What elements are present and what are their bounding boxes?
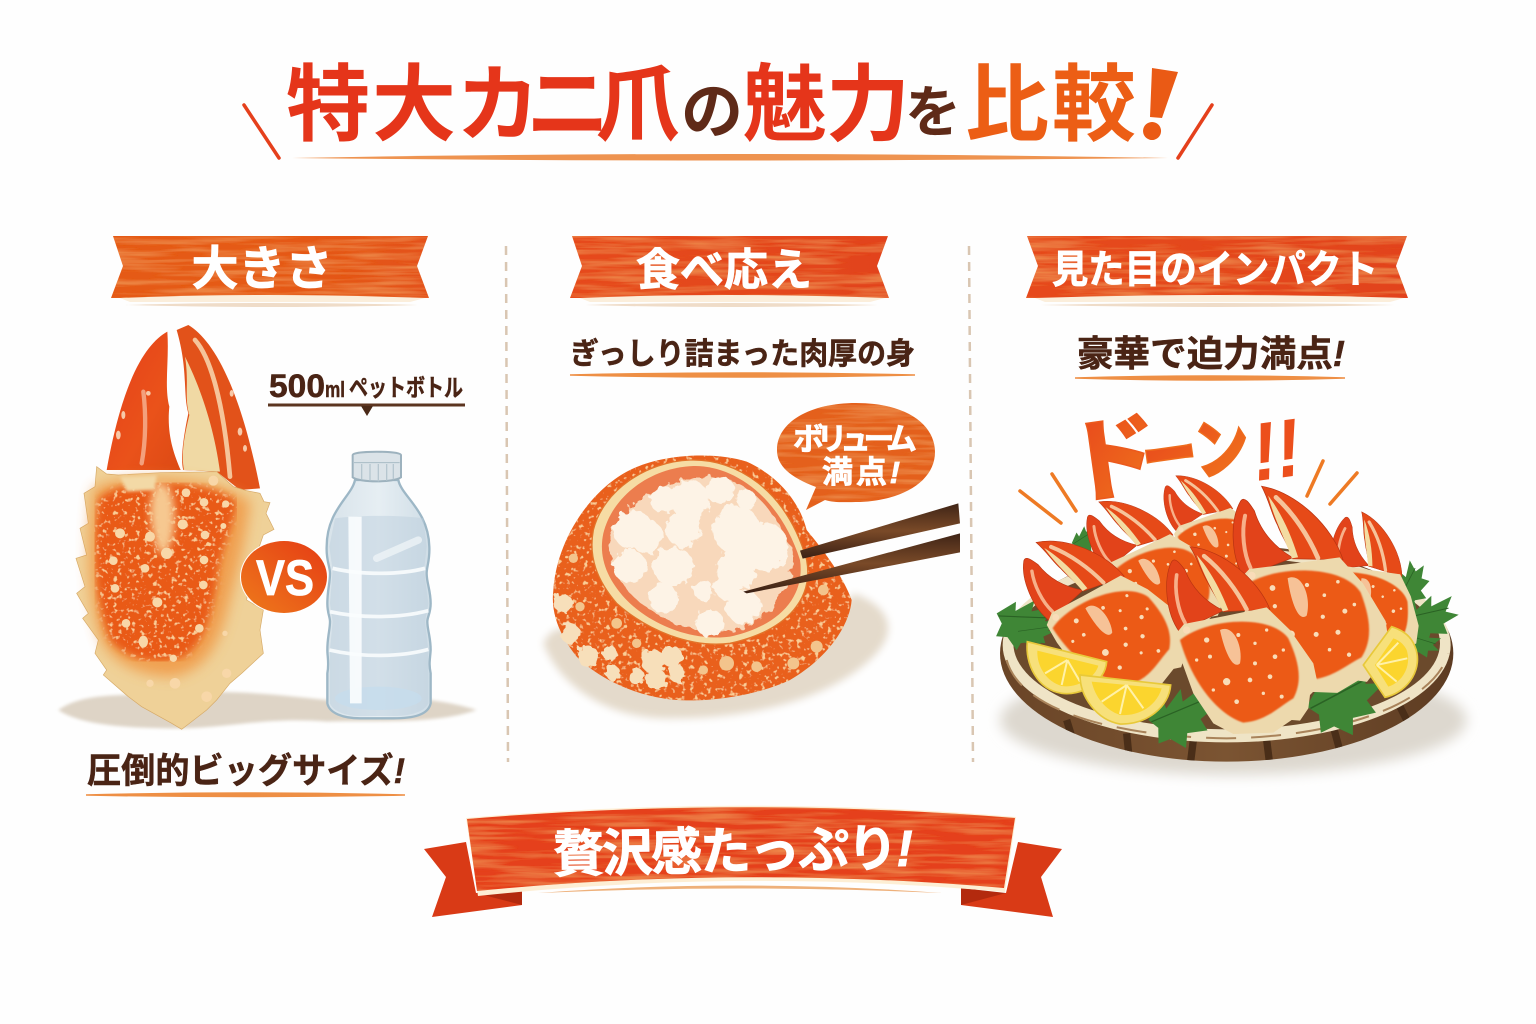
PET bottle <box>327 452 431 718</box>
label: 500ml PET bottle <box>268 368 465 416</box>
speech bubble: volume <box>777 403 935 510</box>
ribbon heading: visual impact <box>1026 236 1408 307</box>
bottle highlights <box>329 568 428 655</box>
title underline <box>292 154 1168 160</box>
ground shadow <box>58 692 477 728</box>
back claw B <box>1081 477 1235 652</box>
crab claw with shadow <box>58 325 477 729</box>
don sound effect: !! <box>1246 402 1306 499</box>
ribbon heading: size <box>111 236 429 307</box>
banner folds <box>476 888 1006 905</box>
claw orange shell halo <box>89 478 250 677</box>
divider left <box>506 246 508 762</box>
label: 500ml PET bottle: 500 <box>269 368 325 404</box>
title text: charm: 魅力 <box>743 58 910 152</box>
claw left finger <box>107 332 181 470</box>
banner text: 贅沢感たっぷり! <box>553 820 914 883</box>
plate of crab claws <box>991 464 1467 775</box>
right claw E <box>1297 506 1452 677</box>
label: 500ml PET bottle: ペットボトル <box>349 375 463 402</box>
plate shadow <box>1000 665 1467 775</box>
crab meat <box>609 476 793 637</box>
open crab claw with meat <box>543 455 960 718</box>
caption: luxurious and impactful: 豪華で迫力満点! <box>1077 333 1345 374</box>
speech bubble: volume: 満点! <box>822 455 900 490</box>
left claw A <box>1015 507 1201 715</box>
divider right <box>969 246 973 762</box>
don sound effect: ド <box>1062 405 1165 517</box>
shell outer <box>553 455 852 700</box>
title accent slash right <box>1178 105 1212 158</box>
don sound effect <box>1062 385 1306 524</box>
dish shadow <box>543 593 888 718</box>
caption: packed thick meat: ぎっしり詰まった肉厚の身 <box>570 338 915 371</box>
claw orange shell <box>95 483 237 661</box>
shell rim <box>592 460 808 644</box>
label: 500ml PET bottle: ml <box>325 377 345 402</box>
caption: overwhelming big size: 圧倒的ビッグサイズ! <box>87 751 405 791</box>
ribbon heading: size: 大きさ <box>192 242 332 295</box>
title text: no: の <box>681 78 743 147</box>
VS badge <box>240 540 328 614</box>
ribbon heading: satisfying <box>570 236 889 307</box>
claw palm spots <box>109 476 231 702</box>
title accent slash left <box>244 105 279 158</box>
VS badge: VS <box>256 550 314 606</box>
title exclamation mark <box>1143 68 1178 140</box>
banner right tail <box>961 842 1062 917</box>
speech bubble: volume: ボリューム <box>793 422 917 457</box>
lemon wedge left <box>1027 642 1107 694</box>
bottle cap <box>353 452 401 481</box>
lemon wedge right <box>1363 627 1417 697</box>
bottle body <box>327 480 431 718</box>
bottom banner <box>424 806 1062 917</box>
title text: crab claws: 特大カニ爪 <box>286 58 680 152</box>
ribbon heading: satisfying: 食べ応え <box>636 246 812 295</box>
leaves <box>991 520 1461 755</box>
banner underline <box>538 886 942 893</box>
lemon wedge center <box>1080 675 1171 724</box>
panel: size <box>58 236 477 796</box>
title <box>244 58 1212 160</box>
chopsticks <box>743 503 960 593</box>
shell cream patches <box>569 554 829 675</box>
banner main ribbon <box>466 806 1016 896</box>
back claw C <box>1161 464 1275 598</box>
shell interior <box>602 466 801 638</box>
claw right finger <box>177 325 260 490</box>
panel: eating satisfaction <box>543 236 960 718</box>
claw palm <box>76 467 274 729</box>
bottle water <box>329 516 428 716</box>
burst lines <box>1020 461 1357 523</box>
right-center claw D <box>1222 484 1400 698</box>
front claw <box>1167 547 1318 734</box>
title text: compare: 比較 <box>965 58 1136 152</box>
ribbon heading: visual impact: 見た目のインパクト <box>1052 249 1378 292</box>
title text: wo: を <box>905 81 961 144</box>
don sound effect: ーン <box>1137 408 1254 496</box>
panel: visual impact <box>991 236 1467 775</box>
wooden plate <box>1000 545 1453 767</box>
banner left tail <box>424 842 522 917</box>
